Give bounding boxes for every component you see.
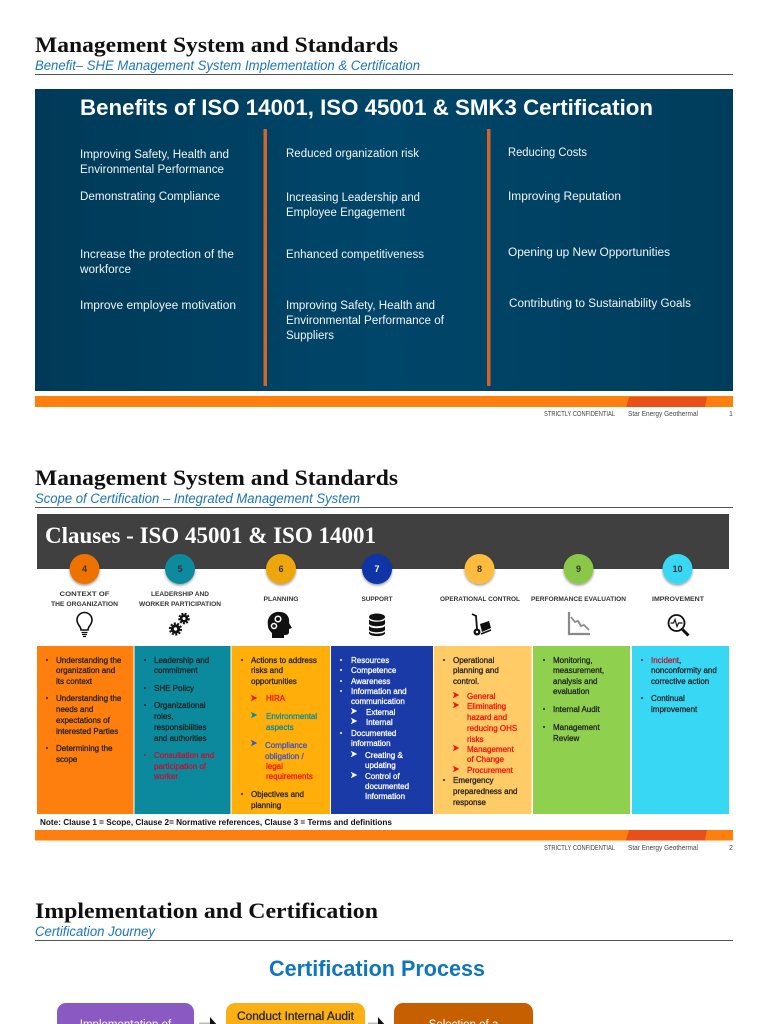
benefits column 2: Environmental Performance of (286, 315, 445, 327)
clause column: context of the organization: Understanding the (56, 656, 122, 665)
benefits column 2: Improving Safety, Health and (286, 300, 435, 312)
slide 3: certification journey (35, 898, 733, 1024)
arrow 1 (199, 1017, 218, 1024)
clause column: support: Internal (366, 718, 393, 727)
clause column: support: Competence (351, 666, 397, 675)
clause labels: WORKER PARTICIPATION (139, 601, 221, 608)
clause column: context of the organization: Understanding the (56, 694, 122, 703)
clause column: context of the organization: its context (56, 677, 93, 686)
process step: internal audit (226, 1003, 365, 1024)
clause number circles (70, 554, 692, 584)
benefits column 3: Opening up New Opportunities (508, 247, 670, 259)
clause column: performance evaluation: Monitoring, (553, 656, 593, 665)
clause labels: PLANNING (264, 596, 298, 603)
clause column: leadership: commitment (154, 666, 198, 675)
clause column: performance evaluation: Management (553, 723, 600, 732)
icon: hand truck (472, 614, 491, 636)
clause column: improvement: nonconformity and (651, 666, 717, 675)
clause column: leadership: worker (153, 772, 178, 781)
benefits column 1: Improving Safety, Health and (80, 149, 229, 161)
clause column: planning: opportunities (251, 677, 297, 686)
slide 2: clauses (35, 465, 733, 852)
clause column: leadership: roles, (154, 712, 174, 721)
clause column: support: Awareness (351, 677, 390, 686)
clause column: performance evaluation: analysis and (553, 677, 597, 686)
clause column: operational control: Eliminating (467, 702, 506, 711)
clause column: operational control: risks (467, 735, 483, 744)
clause labels: OPERATIONAL CONTROL (440, 596, 520, 603)
footer text 1: 1 (729, 411, 733, 418)
clause number circles: 5 (177, 564, 183, 574)
clause column: leadership: Organizational (154, 701, 206, 710)
clause column: planning: legal (266, 762, 283, 771)
clause column: leadership: and authorities (154, 734, 206, 743)
icon: light bulb (77, 613, 92, 636)
clause column: support: Control of (365, 772, 400, 781)
slide 2 heading: Scope of Certification – Integrated Management System (35, 491, 360, 506)
clause column: support: External (366, 708, 396, 717)
clause column: performance evaluation: evaluation (553, 687, 589, 696)
panel: benefits of certification (35, 89, 733, 391)
footer text 2 (544, 845, 733, 852)
benefits column 2: Enhanced competitiveness (286, 249, 424, 261)
clause column: planning: planning (251, 801, 281, 810)
clause column: improvement: improvement (651, 705, 698, 714)
footer text 1: STRICTLY CONFIDENTIAL (544, 411, 615, 418)
clause column: planning: Compliance (265, 741, 308, 750)
slide 3 heading: Certification Journey (35, 924, 156, 939)
clause column: planning (232, 646, 330, 814)
clause column: performance evaluation: Review (553, 734, 579, 743)
clause column: context of the organization (37, 646, 134, 814)
clause column: leadership: SHE Policy (154, 684, 194, 693)
clause labels: LEADERSHIP AND (151, 591, 209, 598)
arrow 2 (368, 1017, 386, 1024)
clause column: operational control: of Change (467, 755, 504, 764)
benefits column 1: Demonstrating Compliance (80, 191, 220, 203)
process step: internal audit: Conduct Internal Audit (237, 1011, 355, 1023)
benefits column 2: Increasing Leadership and (286, 192, 420, 204)
clause column: planning: Environmental (266, 712, 317, 721)
benefits column 1: Increase the protection of the (80, 249, 234, 261)
clause column: performance evaluation: measurement, (553, 666, 604, 675)
clause column: performance evaluation (533, 646, 630, 814)
clause column: planning: Objectives and (251, 790, 304, 799)
clause labels: CONTEXT OF (60, 591, 110, 598)
clause column: context of the organization: scope (56, 755, 78, 764)
clause column: support: communication (351, 697, 405, 706)
clause number circles: 10 (672, 564, 683, 574)
clause column: planning: HIRA (266, 694, 286, 703)
icon: declining chart (569, 612, 590, 634)
slide 1 heading (35, 32, 733, 75)
clause column: context of the organization: needs and (56, 705, 93, 714)
icon: gears (170, 614, 189, 635)
footer text 1: Star Energy Geothermal (628, 411, 698, 418)
clause column: support (331, 646, 433, 814)
process step: implementation (57, 1003, 194, 1024)
clause number circles: 8 (477, 564, 482, 574)
clause column: operational control: General (467, 692, 496, 701)
slide 1 heading: Benefit– SHE Management System Implementation & Certification (35, 58, 420, 73)
footer text 1 (544, 411, 733, 418)
clause column: operational control: planning and (453, 666, 499, 675)
clause number circles: 7 (374, 564, 380, 574)
clause column: operational control: Management (467, 745, 514, 754)
clause column: leadership: responsibilities (154, 723, 206, 732)
clause labels: SUPPORT (362, 596, 393, 603)
clause column: support: Documented (351, 729, 396, 738)
clause column: operational control (434, 646, 532, 814)
clause column: planning: obligation / (265, 752, 304, 761)
clause column: context of the organization: organization and (56, 666, 115, 675)
clause number circles: 9 (576, 564, 581, 574)
clause column: leadership: Leadership and (154, 656, 209, 665)
clause column: support: updating (365, 761, 396, 770)
icon: database (369, 614, 385, 636)
clause column: context of the organization: Determining the (56, 744, 113, 753)
benefits column 3: Reducing Costs (508, 147, 587, 159)
slide 1: benefits (35, 32, 733, 418)
certification process title: Certification Process (269, 956, 485, 981)
clause column: planning: Actions to address (251, 656, 317, 665)
clause column: leadership (134, 646, 230, 814)
clause column: operational control: Procurement (467, 766, 514, 775)
panel title: Benefits of ISO 14001, ISO 45001 & SMK3 Certification (80, 95, 653, 120)
footer bar 2 (35, 830, 733, 840)
benefits column 1 (79, 149, 236, 312)
clause number circles: 6 (278, 564, 284, 574)
clause column: improvement (632, 646, 729, 814)
footer text 2: Star Energy Geothermal (628, 845, 698, 852)
clause column: leadership: Consultation and (154, 751, 214, 760)
slide 1 heading: Management System and Standards (35, 32, 398, 57)
benefits column 3: Contributing to Sustainability Goals (509, 298, 691, 310)
clause column: improvement: Continual (651, 694, 685, 703)
clause column: improvement: corrective action (651, 677, 709, 686)
icon: magnifier with pulse (668, 615, 688, 636)
benefits column 1: workforce (79, 264, 131, 276)
footer text 2: 2 (729, 845, 733, 852)
slide 3 heading (35, 898, 733, 941)
clause column: context of the organization: expectations of (56, 716, 111, 725)
clause column: operational control: hazard and (467, 713, 507, 722)
clause column: operational control: control. (453, 677, 479, 686)
benefits column 2: Employee Engagement (286, 207, 406, 219)
footer bar 1 (35, 396, 733, 407)
clause labels (51, 591, 705, 608)
slide 2 heading (35, 465, 733, 508)
icon: head with gears (268, 612, 292, 638)
clause labels: IMPROVEMENT (652, 596, 705, 603)
clause column: performance evaluation: Internal Audit (553, 705, 600, 714)
clause column: support: Information and (351, 687, 407, 696)
clauses banner (37, 514, 729, 569)
process step: selection (394, 1003, 533, 1024)
clauses banner: Clauses - ISO 45001 & ISO 14001 (45, 523, 376, 549)
clause labels: PERFORMANCE EVALUATION (531, 596, 626, 603)
clause column: operational control: Emergency (453, 776, 493, 785)
clause column: operational control: preparedness and (453, 787, 518, 796)
benefits column 1: Improve employee motivation (80, 300, 236, 312)
clause column: operational control: Operational (453, 656, 495, 665)
benefits column 2: Reduced organization risk (286, 148, 419, 160)
note: Note: Clause 1 = Scope, Clause 2= Normative references, Clause 3 = Terms and definitions (40, 817, 392, 827)
clause column: support: information (351, 739, 391, 748)
footer text 2: STRICTLY CONFIDENTIAL (544, 845, 615, 852)
clause number circles: 4 (82, 564, 87, 574)
clause labels: THE ORGANIZATION (51, 601, 118, 608)
clause column: planning: risks and (251, 666, 283, 675)
clause column: operational control: reducing OHS (467, 724, 517, 733)
benefits column 2: Suppliers (286, 330, 334, 342)
clause column: planning: aspects (266, 723, 294, 732)
clause column: planning: requirements (266, 772, 313, 781)
slide 2 heading: Management System and Standards (35, 465, 398, 490)
clause column: improvement: Incident, (651, 656, 681, 665)
slide 3 heading: Implementation and Certification (35, 898, 379, 923)
clause column: support: Resources (351, 656, 389, 665)
clause column: leadership: participation of (154, 762, 207, 771)
benefits column 3 (508, 147, 691, 310)
benefits column 2 (286, 148, 445, 342)
benefits column 1: Environmental Performance (80, 164, 224, 176)
clause column: operational control: response (453, 798, 486, 807)
clause column: support: documented (365, 782, 409, 791)
benefits column 3: Improving Reputation (508, 191, 621, 203)
clause column: support: Creating & (365, 751, 403, 760)
clause column: support: Information (365, 792, 405, 801)
clause column: context of the organization: interested Parties (56, 727, 118, 736)
